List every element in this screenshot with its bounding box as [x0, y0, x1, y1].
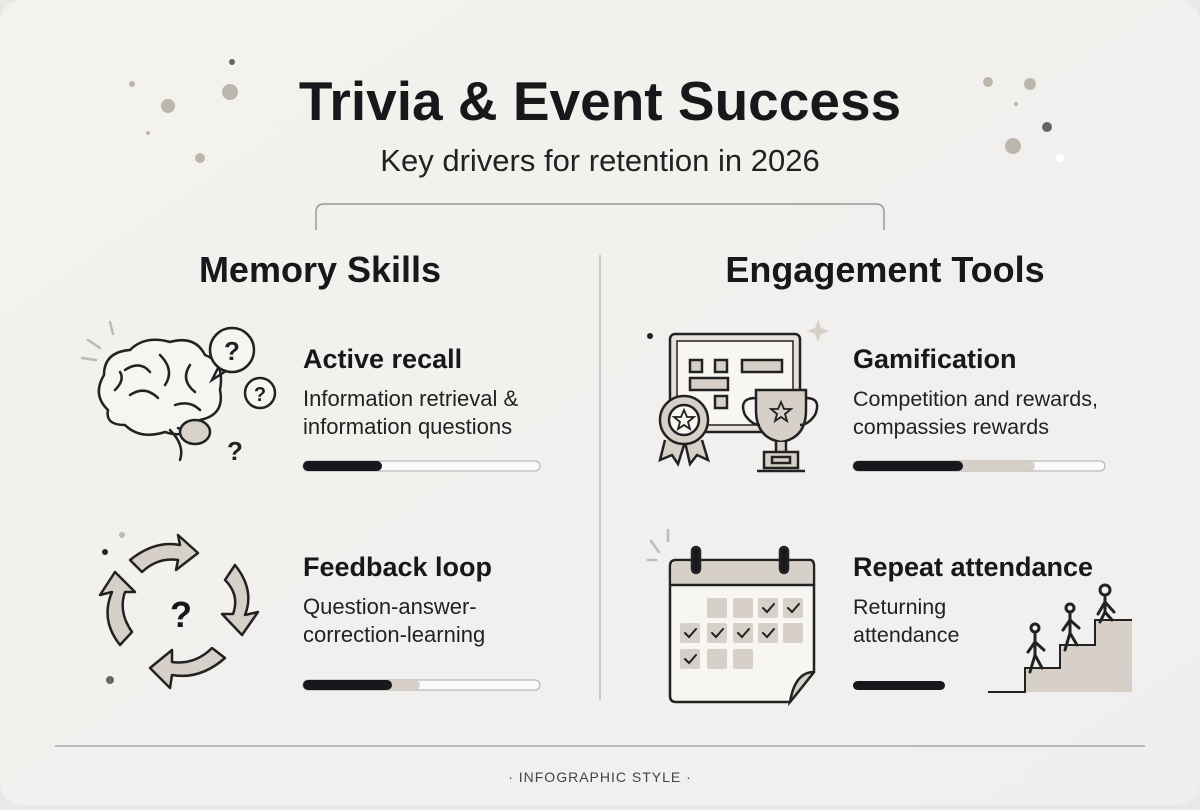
text: Gamification: compassies rewards — [853, 415, 1049, 439]
subtitle: Key drivers for retention in 2026 — [380, 143, 820, 178]
progress bar: repeat attendance — [853, 681, 945, 690]
icon: brain with question marks — [82, 322, 275, 460]
text: Repeat attendance: attendance — [853, 623, 959, 647]
text: ? — [227, 436, 243, 466]
text: Gamification — [853, 344, 1098, 439]
icon: leaderboard with trophy and medal — [647, 320, 829, 471]
text: ? — [224, 336, 240, 366]
text: ? — [170, 594, 192, 635]
progress bar: feedback loop — [303, 680, 540, 690]
text: Repeat attendance: Repeat attendance — [853, 552, 1093, 582]
icon: people climbing stairs — [988, 585, 1132, 692]
icon: calendar with checks — [648, 530, 814, 702]
text: ? — [254, 384, 266, 406]
title: Trivia & Event Success — [299, 70, 901, 132]
text: Active recall — [303, 344, 519, 439]
text: Feedback loop: Question-answer- — [303, 594, 477, 619]
icon: feedback cycle arrows — [100, 532, 258, 688]
progress bar: gamification — [853, 461, 1105, 471]
footer: · INFOGRAPHIC STYLE · — [508, 769, 692, 785]
progress bar: active recall — [303, 461, 540, 471]
text: Gamification: Gamification — [853, 344, 1017, 374]
text: Active recall: Active recall — [303, 344, 462, 374]
text: Gamification: Competition and rewards, — [853, 387, 1098, 411]
heading: Memory Skills: Memory Skills — [199, 249, 441, 290]
text: Feedback loop: Feedback loop — [303, 552, 492, 582]
text: Repeat attendance — [853, 552, 1093, 647]
text: Active recall: Information retrieval & — [303, 386, 519, 411]
text: Repeat attendance: Returning — [853, 595, 946, 619]
text: Feedback loop — [303, 552, 492, 647]
text: Feedback loop: correction-learning — [303, 622, 485, 647]
decorative dots — [129, 59, 1064, 163]
text: Active recall: information questions — [303, 414, 512, 439]
heading: Engagement Tools: Engagement Tools — [725, 249, 1045, 290]
